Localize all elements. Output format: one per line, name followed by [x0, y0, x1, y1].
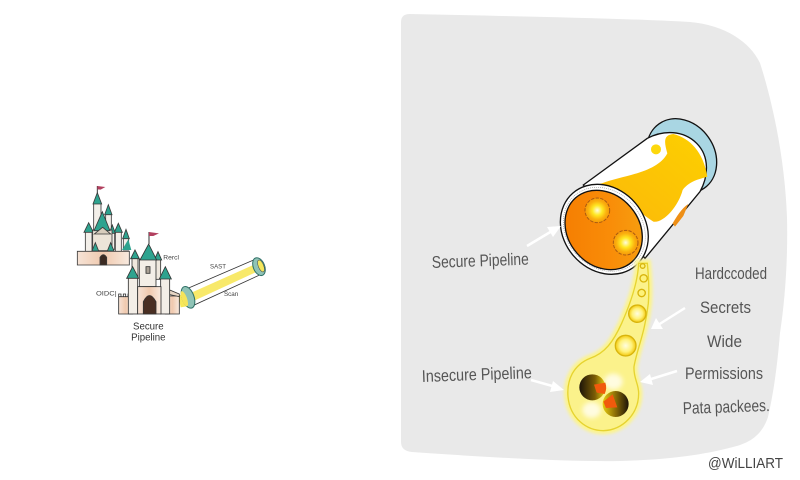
icon: back castle	[77, 186, 131, 265]
label: wide: Wide	[707, 332, 742, 351]
drops	[615, 264, 647, 356]
glowing orbs	[585, 198, 638, 255]
label: hardcoded: Hardccoded	[695, 264, 767, 283]
arrow: to insecure pipeline	[531, 380, 564, 392]
tube mouth	[542, 166, 667, 292]
credit: watermark: @WiLLIART	[708, 455, 783, 472]
bulb outline	[568, 263, 649, 431]
labels: small castle text: SAST	[210, 263, 226, 270]
arrow: wide permissions	[640, 371, 677, 385]
illustration: small secure pipeline castles	[77, 186, 268, 343]
label: data packets: Pata packees.	[682, 396, 770, 418]
icon: yellow drip bulb	[568, 263, 649, 431]
icon: pouring tube	[542, 105, 731, 292]
labels: small castle text	[96, 254, 239, 298]
bulb glow	[568, 263, 649, 431]
panel: grey background	[401, 14, 787, 461]
title: secure pipeline caption: Pipeline	[131, 332, 166, 343]
label: secrets: Secrets	[700, 298, 751, 317]
title: secure pipeline caption	[131, 321, 166, 343]
label: insecure pipeline: Insecure Pipeline	[421, 363, 532, 386]
labels: small castle text: Scan	[224, 291, 239, 298]
arrow: to secure pipeline	[527, 226, 561, 246]
icon: front castle	[119, 232, 179, 314]
icon: pipe with rims	[178, 256, 268, 310]
label: secure pipeline: Secure Pipeline	[431, 250, 529, 272]
dark contaminated balls	[579, 374, 629, 417]
tube body	[583, 133, 706, 258]
far rim of tube	[632, 105, 731, 207]
label: permissions: Permissions	[685, 364, 763, 383]
liquid flow	[600, 134, 707, 222]
title: secure pipeline caption: Secure	[133, 321, 164, 332]
droplet in tube	[651, 144, 661, 154]
labels: small castle text: Rercl	[163, 254, 179, 261]
arrow: hardcoded secrets	[651, 308, 685, 329]
labels: small castle text: OIDC|	[96, 290, 117, 297]
